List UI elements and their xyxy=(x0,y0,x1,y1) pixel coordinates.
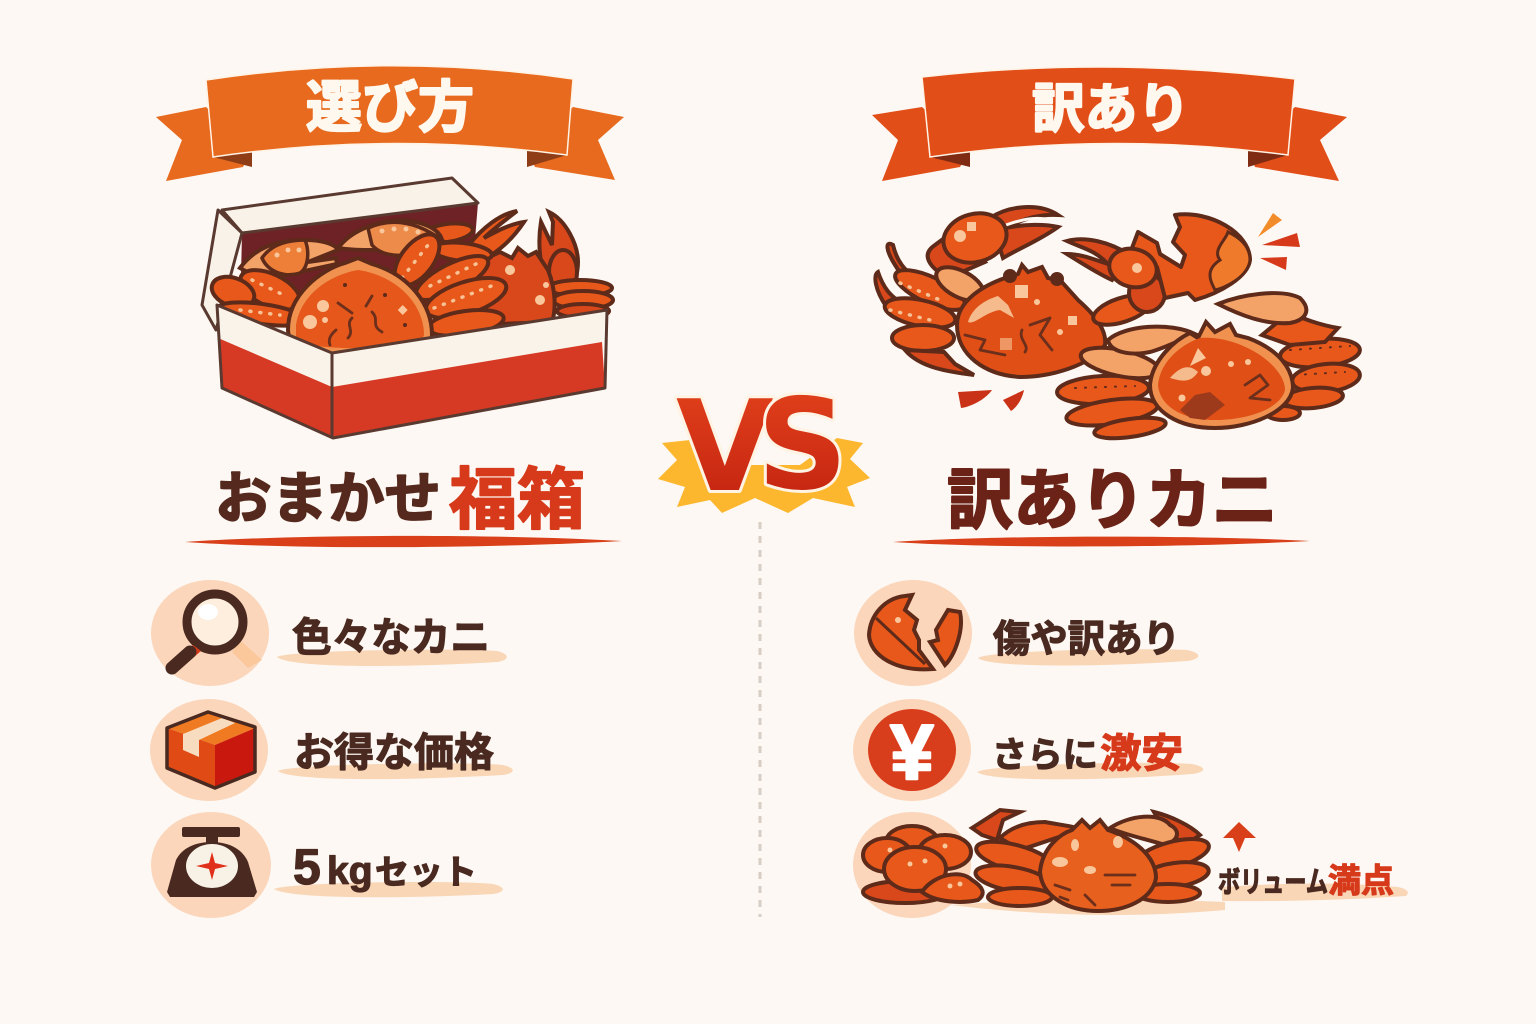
right claw xyxy=(539,212,578,296)
item: 5kgセット xyxy=(151,812,503,918)
impact mark: bottom left xyxy=(958,390,992,408)
item: さらに激安: さらに xyxy=(992,736,1098,775)
icon: large crab xyxy=(972,810,1212,911)
right crab body xyxy=(1150,322,1293,428)
left title: おまかせ福箱 xyxy=(185,463,622,547)
crabs in the box xyxy=(208,211,613,358)
left title: おまかせ福箱: おまかせ xyxy=(215,467,441,530)
left legs xyxy=(234,262,306,318)
right banner: 訳あり: 訳あり xyxy=(1032,80,1190,139)
right title: 訳ありカニ: 訳ありカニ xyxy=(947,463,1278,537)
item: ボリューム満点: 満点 xyxy=(1328,862,1394,899)
VS text: V xyxy=(676,373,774,520)
item: さらに激安 xyxy=(853,699,1203,801)
item: さらに激安: 激安 xyxy=(1100,732,1183,776)
left title: おまかせ福箱: 福箱 xyxy=(449,463,585,538)
item: 5kgセット: kg xyxy=(327,850,373,893)
item: 色々なカニ: 色々なカニ xyxy=(292,616,490,660)
top right claw xyxy=(468,211,524,262)
VS text: S xyxy=(757,371,848,518)
left crab arms and legs xyxy=(875,207,1058,375)
left banner: 選び方 xyxy=(156,66,624,181)
back crab body xyxy=(470,248,555,325)
top claw arm xyxy=(338,220,442,252)
illustration: damaged crabs xyxy=(875,207,1361,442)
left crab body xyxy=(957,265,1105,377)
center dashed divider xyxy=(758,522,762,917)
icon: pile of crab parts xyxy=(863,826,983,903)
impact mark: top xyxy=(1258,213,1282,237)
box lid flap xyxy=(202,210,242,330)
item: お得な価格: お得な価格 xyxy=(294,731,494,775)
icon: magnifying glass xyxy=(172,594,262,668)
item: ボリューム満点: ボリューム xyxy=(1218,866,1328,899)
impact mark: lower xyxy=(1260,257,1287,270)
right legs of main crab xyxy=(386,227,448,293)
VS badge xyxy=(658,371,870,520)
illustration: gift box full of crabs xyxy=(202,178,613,438)
arrow: up xyxy=(1223,822,1256,852)
item: 色々なカニ xyxy=(151,580,507,686)
right banner: 訳あり xyxy=(872,67,1347,181)
icon: yen coin: ¥ xyxy=(890,708,934,796)
icon: yen coin xyxy=(868,708,956,796)
icon: broken crab shell xyxy=(869,595,961,669)
item: 傷や訳あり: 傷や訳あり xyxy=(993,619,1180,661)
broken claw xyxy=(1067,214,1250,331)
icon: kitchen scale xyxy=(167,827,257,897)
item: ボリューム満点 xyxy=(853,810,1408,918)
item: 5kgセット: 5 xyxy=(293,839,321,895)
starburst xyxy=(658,438,870,513)
icon: cardboard box xyxy=(167,712,255,788)
main crab body xyxy=(288,258,432,358)
box lid interior xyxy=(240,203,478,320)
impact mark: middle xyxy=(1262,233,1300,247)
box front xyxy=(217,305,607,438)
box lid top xyxy=(222,178,478,233)
left claw xyxy=(240,240,338,280)
item: 5kgセット: セット xyxy=(375,854,477,892)
item: お得な価格 xyxy=(150,699,513,801)
left banner: 選び方: 選び方 xyxy=(306,76,474,139)
impact mark: bottom right xyxy=(1003,390,1024,411)
right crab legs and claws xyxy=(1056,293,1361,442)
item: 傷や訳あり xyxy=(854,580,1198,686)
